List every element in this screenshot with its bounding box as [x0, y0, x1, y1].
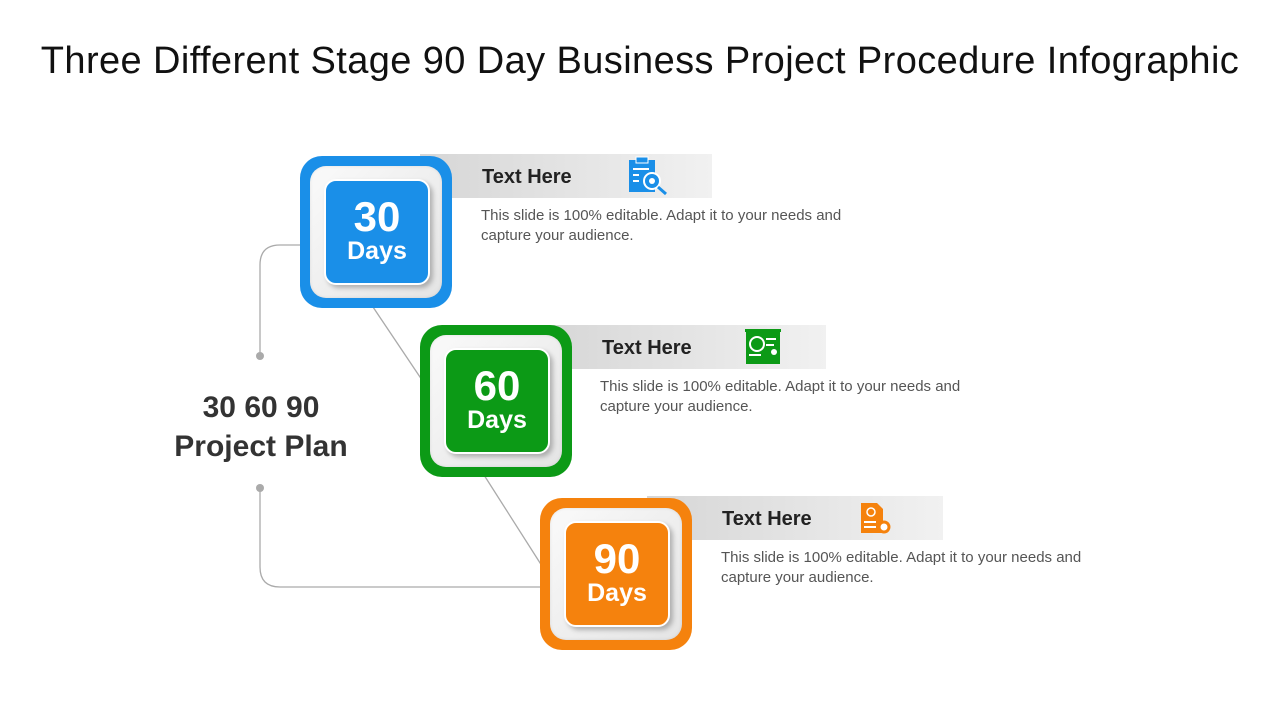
- banner 2: Text Here: [602, 337, 692, 359]
- heading: 30 60 90 Project Plan: Project Plan: [174, 430, 348, 463]
- box: 60 Days: [420, 325, 572, 477]
- banner 1: Text Here: [482, 166, 572, 188]
- banner 3: [647, 496, 943, 540]
- icon: green presentation: [745, 329, 781, 364]
- box: 60 Days: 60: [474, 362, 520, 409]
- banner 2: [540, 325, 826, 369]
- heading: 30 60 90 Project Plan: 30 60 90: [203, 391, 319, 424]
- box: 30 Days: [300, 156, 452, 308]
- text block 1: This slide is 100% editable. Adapt it to your needs and capture your audience.: [481, 207, 841, 244]
- title: Three Different Stage 90 Day Business Project Procedure Infographic: [41, 40, 1239, 82]
- banner 1: [420, 154, 712, 198]
- box: 30 Days: Days: [347, 237, 407, 265]
- box: 90 Days: [540, 498, 692, 650]
- box: 90 Days: 90: [594, 535, 640, 582]
- box: 60 Days: Days: [467, 406, 527, 434]
- text block 3: This slide is 100% editable. Adapt it to your needs and capture your audience.: [721, 549, 1081, 586]
- icon: orange bulb document: [861, 503, 890, 534]
- banner 3: Text Here: [722, 508, 812, 530]
- box: 30 Days: 30: [354, 193, 400, 240]
- text block 2: This slide is 100% editable. Adapt it to your needs and capture your audience.: [600, 378, 960, 415]
- heading: 30 60 90 Project Plan: [174, 391, 348, 463]
- icon: clipboard search: [629, 156, 667, 195]
- box: 90 Days: Days: [587, 579, 647, 607]
